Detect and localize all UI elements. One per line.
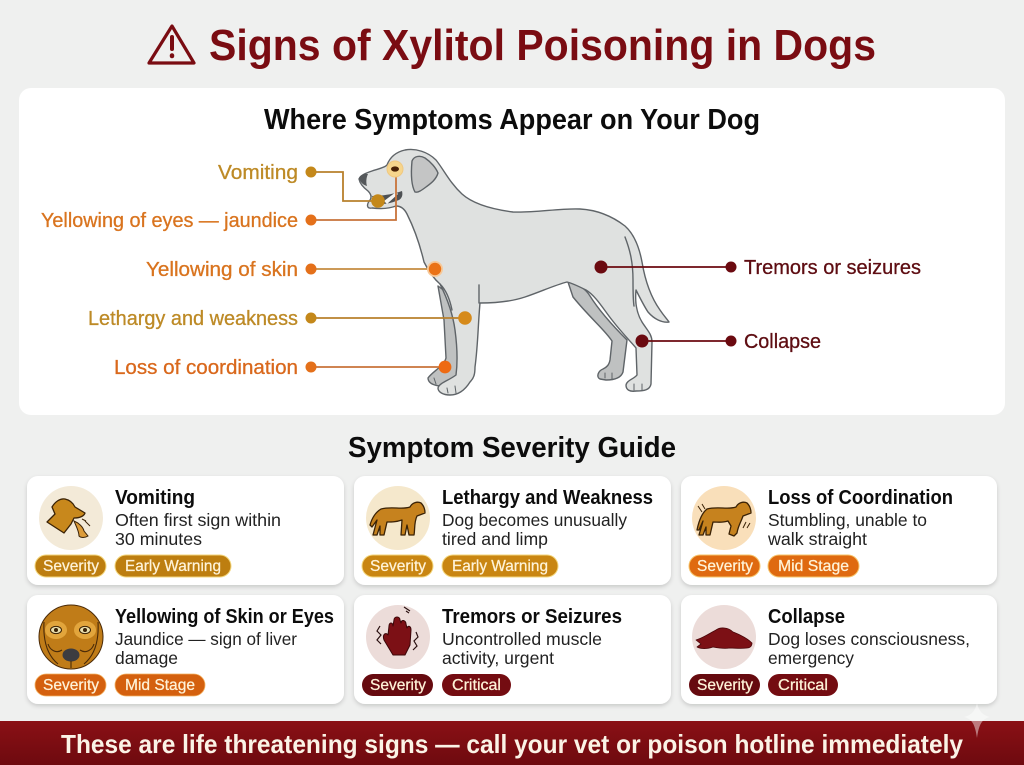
badge: severity: Severity <box>697 677 753 694</box>
card: lethargy and weakness <box>354 476 671 585</box>
card: tremors or seizures <box>354 595 671 704</box>
badge: mid stage: Mid Stage <box>778 558 849 575</box>
card: collapse <box>681 595 997 704</box>
badge: mid stage <box>115 674 205 696</box>
badge: severity <box>35 674 106 696</box>
badge: severity: Severity <box>370 677 426 694</box>
card: yellowing of skin or eyes: Yellowing of Skin or Eyes <box>115 606 334 628</box>
card: yellowing of skin or eyes: Jaundice — sign of liver <box>115 629 297 649</box>
card: lethargy and weakness: Lethargy and Weakness <box>442 487 653 509</box>
badge: severity: Severity <box>43 558 99 575</box>
callout: lethargy and weakness: Lethargy and weakness <box>88 308 298 330</box>
icon: collapsed dog <box>692 605 756 669</box>
badge: mid stage <box>768 555 859 577</box>
icon: sparkle watermark <box>964 703 990 738</box>
card: collapse: Collapse <box>768 606 845 628</box>
callout: tremors or seizures <box>594 257 921 279</box>
badge: mid stage: Mid Stage <box>125 677 195 694</box>
badge: critical: Critical <box>778 677 828 694</box>
callout: loss of coordination: Loss of coordination <box>114 357 298 379</box>
heading: symptom severity guide: Symptom Severity Guide <box>348 432 676 464</box>
icon: warning triangle <box>149 26 194 63</box>
card: vomiting: Often first sign within <box>115 510 281 530</box>
icon: vomiting dog <box>39 486 103 550</box>
dog illustration <box>359 149 669 395</box>
badge: critical <box>442 674 511 696</box>
heading: where symptoms appear: Where Symptoms Appear on Your Dog <box>264 104 760 136</box>
badge: early warning <box>115 555 231 577</box>
callout: vomiting: Vomiting <box>218 162 298 184</box>
card: yellowing of skin or eyes <box>27 595 344 704</box>
badge: severity: Severity <box>697 558 753 575</box>
card: loss of coordination: Loss of Coordination <box>768 487 953 509</box>
card: lethargy and weakness: tired and limp <box>442 529 548 549</box>
badge: severity <box>689 674 760 696</box>
badge: severity <box>362 674 433 696</box>
badge: severity <box>689 555 760 577</box>
callout: collapse <box>636 331 821 353</box>
callout: tremors or seizures: Tremors or seizures <box>744 257 921 279</box>
badge: severity: Severity <box>370 558 426 575</box>
card: lethargy and weakness: Dog becomes unusually <box>442 510 627 530</box>
callout: lethargy and weakness <box>88 308 472 330</box>
card: tremors or seizures: activity, urgent <box>442 648 554 668</box>
badge: early warning: Early Warning <box>125 558 221 575</box>
icon: trembling hand <box>366 605 430 669</box>
card: tremors or seizures: Uncontrolled muscle <box>442 629 602 649</box>
callout: vomiting <box>218 162 385 208</box>
callout: yellowing of eyes <box>41 161 403 232</box>
callout: collapse: Collapse <box>744 331 821 353</box>
icon: stumbling dog <box>692 486 756 550</box>
card: vomiting: 30 minutes <box>115 529 202 549</box>
badge: severity <box>362 555 433 577</box>
card: vomiting <box>27 476 344 585</box>
icon: jaundiced dog face <box>39 605 103 669</box>
card: collapse: emergency <box>768 648 854 668</box>
badge: severity <box>35 555 106 577</box>
callout: loss of coordination <box>114 357 451 379</box>
card: collapse: Dog loses consciousness, <box>768 629 970 649</box>
panel: dog anatomy diagram <box>19 88 1005 415</box>
callout: yellowing of eyes: Yellowing of eyes — jaundice <box>41 210 298 232</box>
badge: early warning: Early Warning <box>452 558 548 575</box>
banner: call to action <box>0 721 1024 765</box>
card: yellowing of skin or eyes: damage <box>115 648 178 668</box>
title: Signs of Xylitol Poisoning in Dogs <box>209 21 876 70</box>
badge: critical: Critical <box>452 677 501 694</box>
card: loss of coordination: Stumbling, unable to <box>768 510 927 530</box>
card: loss of coordination: walk straight <box>767 529 867 549</box>
card: tremors or seizures: Tremors or Seizures <box>442 606 622 628</box>
banner: call to action: These are life threatening signs — call your vet or poison hotline immediately <box>61 729 964 759</box>
callout: yellowing of skin <box>146 259 443 281</box>
badge: critical <box>768 674 838 696</box>
callout: yellowing of skin: Yellowing of skin <box>146 259 298 281</box>
card: vomiting: Vomiting <box>115 487 195 509</box>
badge: early warning <box>442 555 558 577</box>
badge: severity: Severity <box>43 677 99 694</box>
card: loss of coordination <box>681 476 997 585</box>
icon: tired dog <box>366 486 430 550</box>
